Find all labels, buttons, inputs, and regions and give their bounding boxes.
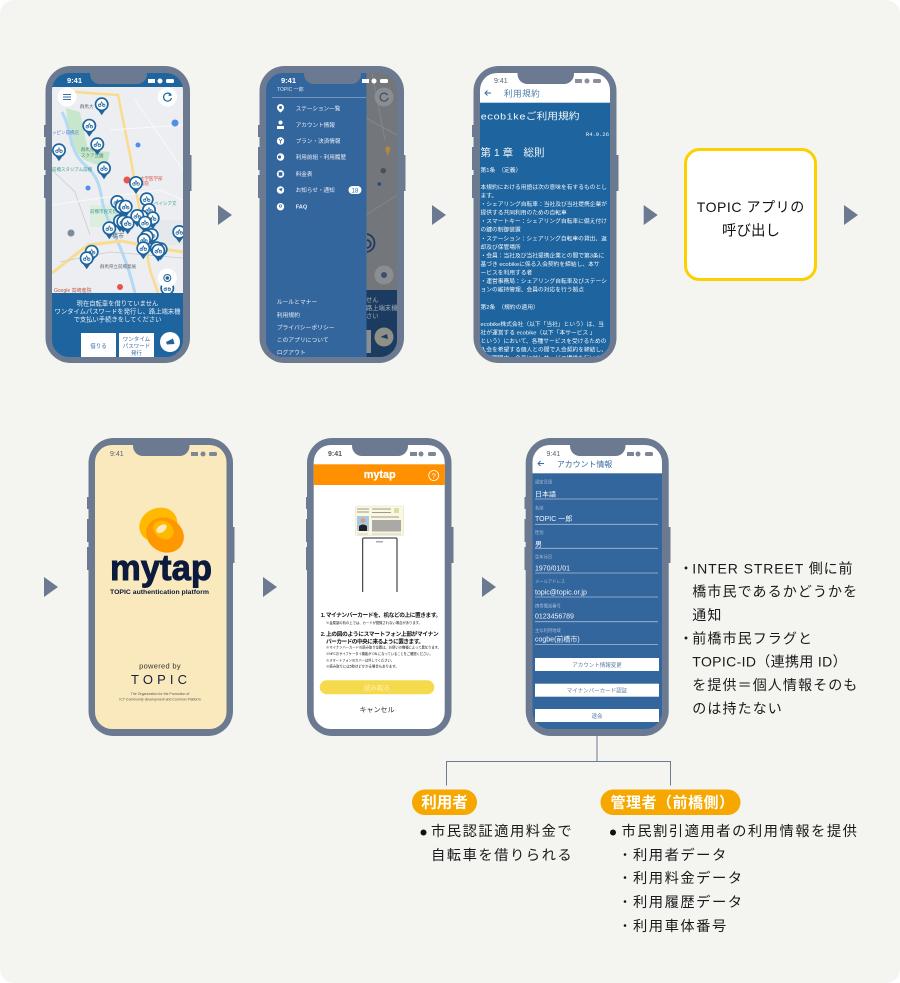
text block: notes: を提供＝個人情報そのも [692,677,858,693]
user name: TOPIC 一郎 [277,87,304,93]
account fields: 名前 [535,504,544,512]
status message: で支払い手続きをしてください [74,314,161,324]
account fields: メールアドレス [535,579,565,585]
text block: notes: のは持たない [692,700,783,716]
terms text: 第 1 章 総則 [480,146,544,159]
callout: TOPIC app launch: 呼び出し [722,222,780,240]
terms text: という）において、各種サービスを受けるための [480,337,607,345]
status message [55,300,180,322]
mytap logo mark [134,502,190,559]
callout: TOPIC app launch: TOPIC アプリの [697,199,804,215]
orange header: ? [432,471,436,480]
phone: side menu [258,66,406,363]
connector lines [446,736,670,786]
header: 利用規約 [504,88,540,98]
button: withdraw [535,709,659,722]
phone: side menu: 路上端末機 [366,303,398,312]
terms text: 利用期間中、会員に対しサービス提供を行います [480,354,607,362]
text block: administrator benefits: 利用履歴データ [633,893,744,911]
terms text: ョンの維持管理、会員の対応を行う拠点 [480,286,584,294]
menu list: プラン・決済情報 [296,137,341,145]
terms text: 却及び保管場所 [480,243,521,251]
status bar [281,76,388,85]
phone: map screen [44,66,192,363]
label: users [412,790,477,815]
terms text: の鍵の制御装置 [480,226,521,234]
terms text [480,110,609,362]
text block: notes: 橋市民であるかどうかを [692,584,858,600]
illustration: card on phone [355,506,404,592]
status bar [546,451,653,458]
text block: notes: ・ [679,630,694,646]
map: 群馬県立 [81,146,99,153]
arrow [218,205,232,225]
status bar: 9:41 [494,78,508,85]
instructions: ※金属製の机の上では、カードが認識されない場合があります。 [326,620,422,625]
menu list: アカウント情報 [296,121,335,129]
phone: mytap splash [87,438,234,736]
phone: card reading [306,438,454,736]
footer links: このアプリについて [277,337,329,344]
button: cancel: キャンセル [360,706,394,714]
status bar: 9:41 [328,451,342,458]
instructions: 2. 上の図のようにスマートフォン上部がマイナン [321,630,439,638]
mytap wordmark: mytap [110,547,212,588]
terms text: ービスを利用する者 [480,268,532,276]
map: 病院 [140,180,149,187]
text block: administrator benefits: 利用料金データ [633,869,744,887]
menu list: 料金表 [296,170,313,178]
instructions: 1. マイナンバーカードを、机などの上に置きます。 [321,611,441,619]
status bar: 9:41 [67,76,82,85]
header [484,89,540,98]
reload button [158,88,177,106]
button: My Number card [535,684,659,697]
account fields: 性別 [535,529,544,536]
terms text: ・運営事務局：シェアリング自転車及びステーシ [480,277,607,285]
account fields: 日本語 [535,490,556,498]
terms text: ・シェアリング自転車：当社及び当社提携企業が [480,200,607,208]
tagline: TOPIC authentication platform [110,589,209,596]
account fields: 主な利用地域 [535,627,561,634]
account fields: 1970/01/01 [535,566,570,572]
text block: notes [679,560,858,716]
organization name: The Organization for the Promotion of [131,692,189,696]
label: users: 利用者 [421,794,468,812]
locate button [158,268,177,288]
map: 大学医学部 [140,175,163,182]
terms text: 第2条 （規約の適用） [480,303,539,311]
button: withdraw: 退会 [591,712,603,720]
status message: 現在自転車を借りていません [77,298,158,308]
text block: notes: ・ [679,560,694,576]
arrow [844,205,858,225]
button: one-time password [119,333,154,357]
status bar [494,78,601,84]
button: one-time password: 発行 [131,349,142,357]
status bar: 9:41 [110,451,124,458]
instructions: ※マイナンバーカードの読み取り位置は、お使いの機種によって異なります。 [326,644,441,650]
terms text: 社が運営する ecobike（以下「本サービス 」 [480,328,596,336]
menu button [58,88,76,106]
button: rent [81,333,116,357]
footer links: ログアウト [277,348,306,356]
terms text: 本規約における用語は次の意味を有するものとし [480,183,607,191]
text block: user benefits: 市民認証適用料金で [431,823,573,840]
button: change account info [535,658,659,671]
terms text: ecobike株式会社（以下「当社」という）は、当 [480,320,604,328]
map: 前橋スタジアム前橋 [52,166,93,173]
map: ッピン前橋店 [52,129,79,136]
status bar [328,451,436,458]
account fields: TOPIC 一郎 [535,515,572,523]
text block: administrator benefits: 市民割引適用者の利用情報を提供 [622,823,858,840]
account fields: 携帯電話番号 [535,602,561,610]
button: My Number card: マイナンバーカード認証 [567,688,628,694]
account fields: cogbe(前橋市) [535,634,580,644]
status bar: 9:41 [281,76,296,85]
menu list: FAQ [296,205,308,211]
account fields: topic@topic.or.jp [535,590,587,596]
badge [348,186,362,194]
header [538,459,612,469]
footer links: ルールとマナー [277,299,317,306]
text block: notes: INTER STREET 側に前 [692,560,853,576]
arrow [482,577,496,597]
status bar: 9:41 [546,451,560,458]
button: read [320,680,434,694]
button: one-time password: ワンタイム [123,335,151,343]
menu list [277,104,346,211]
instructions: ※読み取りには5秒ほどかかる場合もあります。 [326,663,399,668]
terms text: 入会を希望する個人との間で入会契約を締結し、 [480,346,607,354]
text block: administrator benefits: 利用者データ [633,846,728,864]
phone: account info [524,438,670,736]
button: read: 読み取る [364,683,390,692]
map: 群馬大 [80,103,94,110]
footer links [277,299,335,356]
phone: side menu: せん [366,296,379,304]
status message: ワンタイムパスワードを発行し、路上端末機 [55,306,181,316]
label: administrators: 管理者（前橋側） [610,794,735,812]
menu list: 利用前組・利用履歴 [296,153,346,161]
map: Google 高崎産院 [54,287,92,294]
badge: 18 [352,188,359,194]
text block: notes: TOPIC-ID（連携用 ID） [692,654,847,670]
account fields: 0123456789 [535,614,574,620]
phone: terms of use [472,66,618,363]
button: change account info: アカウント情報変更 [572,661,622,669]
label: administrators [600,790,740,815]
phone: side menu: さい [366,312,379,320]
map pins [52,97,186,299]
map: 群馬県立前橋発展 [100,263,136,270]
footer links: プライバシーポリシー [277,324,335,332]
button: one-time password: パスワード [123,343,150,350]
terms text: ・ステーション：シェアリング自転車の貸出、返 [480,234,607,242]
map: スクア公園 [81,152,104,159]
footer links: 利用規約 [277,311,300,319]
button: rent: 借りる [90,342,107,350]
text block: user benefits [420,823,573,864]
organization name: ICT Community development and Common Platform [119,698,201,702]
terms text: 提供する共同利用のための自転車 [480,208,567,216]
orange header [314,464,445,485]
text block: notes: 前橋市民フラグと [692,630,813,646]
map: 前橋市民文化 [90,208,117,215]
status bar [67,78,174,84]
map: ベイシア文 [154,200,177,207]
TOPIC logo: TOPIC [131,672,187,687]
text block: user benefits: 自転車を借りられる [431,847,573,864]
header: アカウント情報 [557,459,612,469]
callout: TOPIC app launch [686,150,816,280]
menu list: ステーション一覧 [296,104,341,112]
text block: notes: 通知 [692,607,723,623]
orange header: mytap [364,469,396,481]
megaphone button [160,332,180,352]
account fields: 生年月日 [535,554,552,560]
account fields: 設定言語 [535,480,553,486]
text block: administrator benefits: 利用車体番号 [633,918,728,935]
arrow [263,577,277,597]
status bar [110,451,217,458]
account fields: 男 [535,540,542,548]
terms text: ・会員：当社及び当社提携企業との間で第3条に [480,252,605,260]
terms text: 基づき ecobikeに係る入会契約を締結し、本サ [480,260,600,268]
instructions: ※NFCおサイフケータイ機能が ON になっていることをご確認ください。 [326,651,433,656]
map [52,87,186,299]
powered by: powered by [139,662,181,670]
terms text: ・スマートキー：シェアリング自転車に備え付け [480,217,607,225]
instructions: バーカードの中央に来るように置きます。 [326,638,424,646]
menu list: お知らせ・通知 [296,186,335,194]
terms text: 第1条 （定義） [480,166,521,174]
terms text: R4.9.26 [586,131,609,138]
arrow [432,205,446,225]
organization name [119,692,201,702]
terms text: ecobikeご利用規約 [480,110,580,122]
account fields [535,480,658,644]
instructions [321,611,441,668]
arrow [44,577,58,597]
text block: administrator benefits [610,823,858,935]
map: 橋市 [112,232,124,240]
instructions: ※スマートフォンのカバーは外してください。 [326,657,394,662]
arrow [644,205,658,225]
terms text: ます。 [480,192,497,200]
